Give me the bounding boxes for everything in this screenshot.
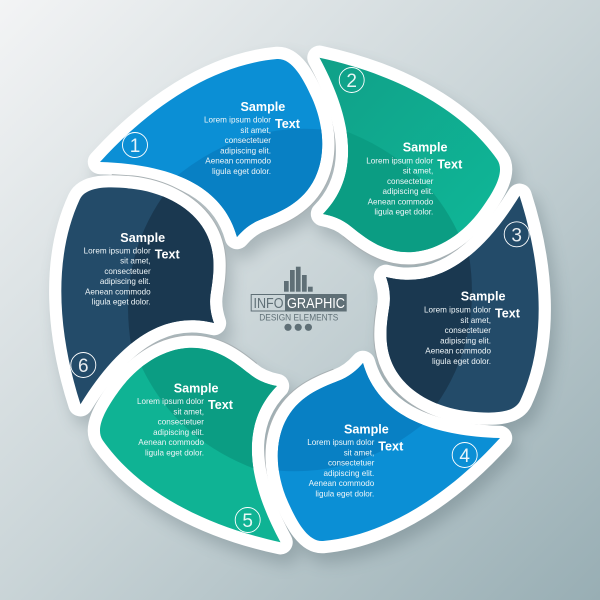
panel 6: navy segment [49, 174, 226, 416]
body 3: Aenean commodo [425, 347, 491, 356]
panel 3: navy segment [373, 184, 551, 426]
number 6: 6 [78, 356, 89, 377]
number 5: 5 [242, 511, 253, 532]
number 2: 2 [346, 71, 357, 92]
body 4: consectetuer [328, 458, 375, 468]
label 3: Text [495, 307, 521, 321]
body 5: Aenean commodo [138, 438, 204, 447]
body 2: ligula eget dolor. [374, 208, 433, 217]
body 3: adipiscing elit. [440, 336, 491, 345]
body 6: sit amet, [120, 257, 151, 266]
label 6 [120, 231, 180, 262]
number 2 [339, 68, 364, 92]
label 1: Sample [240, 100, 285, 114]
label 6: Text [155, 248, 180, 262]
label 4: Sample [344, 423, 389, 437]
body 6: Aenean commodo [85, 287, 151, 296]
label 2: Text [437, 158, 463, 172]
label 2 [403, 140, 463, 172]
panel 4: blue segment [255, 340, 500, 541]
body 1: sit amet, [240, 126, 271, 135]
panel 2: green segment [307, 46, 512, 265]
body 1: adipiscing elit. [220, 146, 271, 155]
number 4 [452, 442, 477, 468]
body 1: consectetuer [225, 136, 271, 145]
body 2: consectetuer [387, 177, 434, 186]
number 4: 4 [459, 446, 470, 467]
body 5: consectetuer [158, 418, 204, 426]
body 2: sit amet, [403, 167, 433, 176]
body 6: ligula eget dolor. [92, 298, 151, 307]
label 5: Sample [174, 381, 219, 395]
body 3: Lorem ipsum dolor [424, 306, 491, 315]
label 6: Sample [120, 231, 165, 245]
body 4: sit amet, [344, 448, 374, 457]
number 1 [122, 132, 148, 158]
label 3: Sample [461, 290, 506, 304]
body 3: ligula eget dolor. [432, 357, 491, 366]
body 4: Aenean commodo [309, 479, 375, 488]
label 4 [344, 423, 404, 453]
number 3: 3 [511, 225, 522, 246]
body 2: Aenean commodo [368, 197, 434, 206]
panel 5: green segment [88, 336, 293, 554]
body 5: Lorem ipsum dolor [137, 397, 204, 406]
body 2: Lorem ipsum dolor [366, 156, 434, 165]
number 5 [235, 508, 260, 532]
center logo [251, 267, 347, 331]
body 6: Lorem ipsum dolor [84, 246, 151, 255]
body 6: adipiscing elit. [100, 277, 151, 286]
label 5: Text [208, 398, 234, 412]
number 3 [504, 222, 529, 247]
body 3: consectetuer [445, 326, 491, 335]
body 4: ligula eget dolor. [315, 489, 374, 498]
number 1: 1 [130, 136, 140, 157]
label 2: Sample [403, 140, 448, 154]
body 1: Aenean commodo [205, 157, 271, 166]
body 3: sit amet, [460, 316, 491, 325]
body 1: Lorem ipsum dolor [204, 116, 271, 125]
number 6 [71, 352, 96, 378]
subtitle: DESIGN ELEMENTS [259, 312, 338, 322]
body 1: ligula eget dolor. [212, 167, 271, 176]
body 5: ligula eget dolor. [145, 448, 204, 457]
label 1 [240, 100, 301, 131]
label 4: Text [378, 439, 404, 453]
body 6: consectetuer [104, 267, 151, 276]
label 1: Text [275, 117, 301, 131]
three dots [284, 324, 312, 331]
panel 1: blue segment [100, 59, 345, 260]
infographic wordmark: GRAPHIC [287, 296, 345, 312]
infographic wordmark [251, 294, 347, 312]
body 4: Lorem ipsum dolor [307, 438, 375, 447]
label 5 [174, 381, 234, 412]
icon: bar chart [284, 267, 313, 292]
body 5: adipiscing elit. [153, 428, 204, 437]
body 2: adipiscing elit. [382, 187, 433, 196]
body 5: sit amet, [173, 407, 204, 416]
body 4: adipiscing elit. [323, 469, 374, 478]
label 3 [461, 290, 521, 321]
infographic wordmark: INFO [254, 296, 284, 312]
